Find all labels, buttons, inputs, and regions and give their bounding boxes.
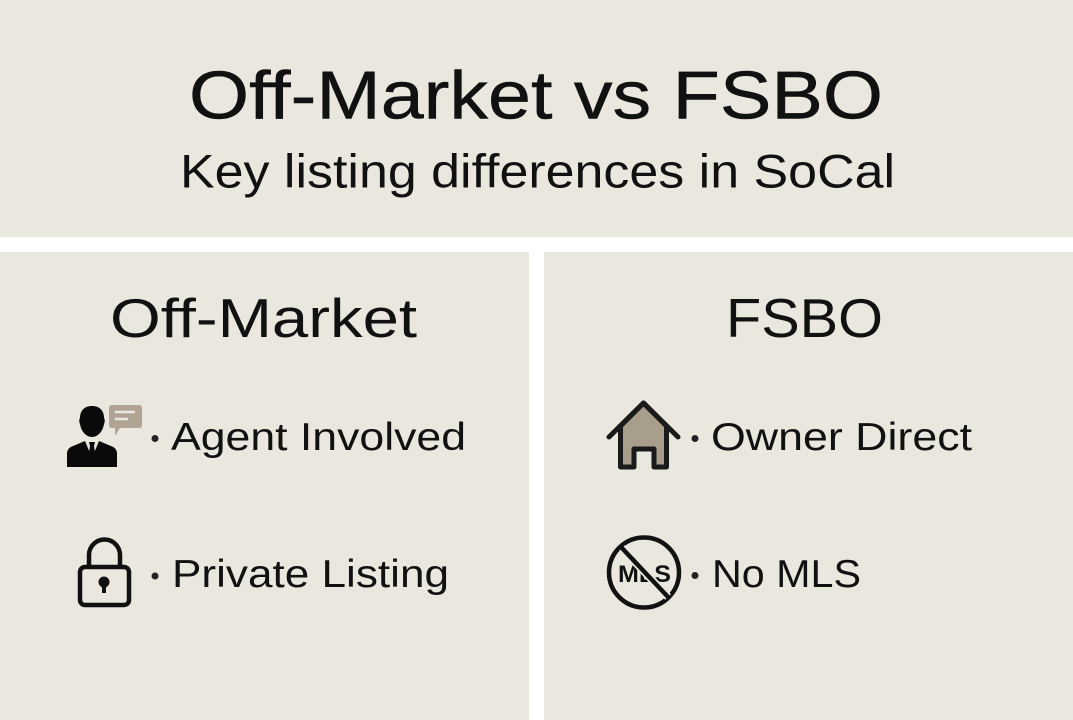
panel: fsbo [544,252,1073,720]
icon: no mls [609,538,679,608]
label: no mls: No MLS [712,553,861,596]
bullet: owner direct [692,435,698,442]
icon: house [609,403,678,467]
heading: off-market: Off-Market [110,287,417,349]
heading: fsbo: FSBO [726,287,883,349]
label: private listing: Private Listing [172,553,449,596]
bullet: private listing [152,572,158,580]
title: Off-Market vs FSBO [189,58,883,134]
label: owner direct: Owner Direct [711,416,972,459]
panel: off-market [0,252,529,720]
label: agent involved: Agent Involved [171,416,466,459]
bullet: no mls [692,572,698,579]
bullet: agent involved [152,435,158,442]
panel: header [0,0,1073,237]
subtitle: Key listing differences in SoCal [180,144,895,198]
icon: agent with speech bubble [67,405,142,467]
icon: padlock [80,540,129,605]
icon: no mls: MLS [618,561,671,588]
